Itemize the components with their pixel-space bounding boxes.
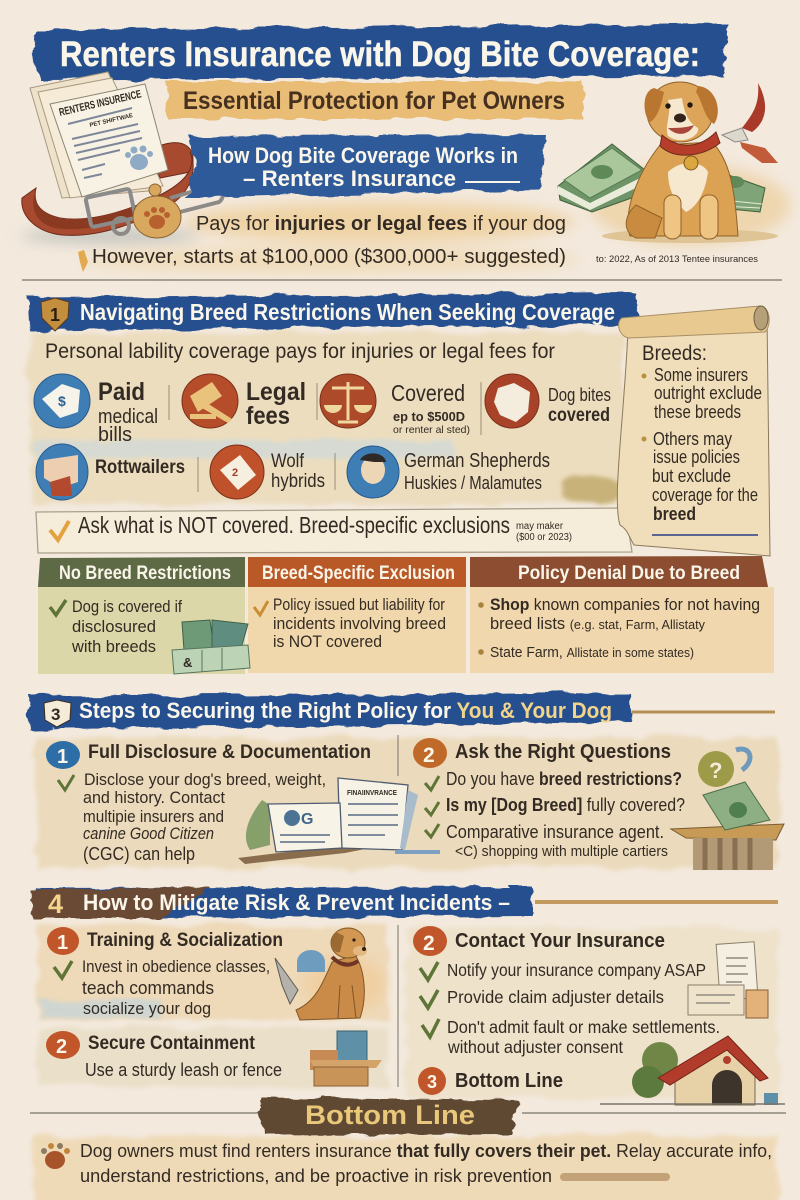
column: breed-specific exclusion: Breed-Specific Exclusion [262, 563, 455, 584]
section 4 banner [30, 887, 532, 919]
breed: wolf hybrids: hybrids [271, 471, 325, 492]
section 1 banner [28, 293, 640, 331]
scroll: breeds: Breeds: [642, 342, 707, 365]
step: contact your insurance: Provide claim adjuster details [447, 987, 664, 1007]
step 3: bottom line [418, 1067, 563, 1095]
column: policy denial: State Farm, Allistate in some states) [490, 644, 694, 661]
intro line: Personal lability coverage pays for injuries or legal fees for [45, 340, 555, 363]
badge 1 [46, 741, 80, 769]
section 3 banner: 3 [51, 705, 60, 724]
column: no breed restrictions: No Breed Restrictions [59, 563, 231, 584]
collar front [22, 152, 193, 235]
callout: ask what is not covered [36, 508, 632, 553]
badge 2 [46, 1031, 80, 1059]
step: secure containment: Secure Containment [88, 1033, 256, 1054]
step: ask the right questions [413, 738, 685, 860]
item: paid medical bills: Paid [98, 378, 145, 406]
step: full disclosure: multipie insurers and [83, 807, 224, 826]
scroll: breeds: breed [653, 504, 696, 524]
column: no breed restrictions: disclosured [72, 617, 156, 636]
illustration: dog [602, 82, 778, 243]
section 1 banner: 1 [50, 305, 60, 325]
item: paid medical bills: bills [98, 424, 132, 446]
scroll: breeds: coverage for the [652, 485, 758, 505]
icon: cash box: & [183, 655, 192, 670]
section 4: mitigate risk [30, 887, 786, 1113]
icon: shepherd [347, 446, 399, 498]
illustration: money on stand [671, 749, 784, 870]
column: no breed restrictions [38, 557, 250, 674]
icon: insurance document and collar [22, 72, 223, 238]
icon: cash box [172, 620, 250, 674]
step: full disclosure: Disclose your dog's breed, weight, [84, 770, 326, 789]
illustration: documents: FINAIINVRANCE [347, 790, 397, 797]
section 4 banner: How to Mitigate Risk & Prevent Incidents – [83, 890, 510, 915]
icon: medical bill: $ [58, 393, 66, 409]
column: no breed restrictions: with breeds [71, 637, 156, 656]
item: covered amount: ep to $500D [393, 410, 465, 424]
step: contact your insurance: Don't admit fault or make settlements. [447, 1017, 720, 1037]
icon: gavel [182, 374, 238, 428]
coverage limit: However, starts at $100,000 ($300,000+ suggested) [92, 245, 566, 268]
column: no breed restrictions: Dog is covered if [72, 597, 182, 616]
bottom line text: Dog owners must find renters insurance that fully covers their pet. Relay accurate info, [80, 1140, 772, 1161]
bottom line banner [258, 1098, 518, 1135]
subtitle banner [167, 82, 583, 119]
item: paid medical bills: medical [98, 406, 158, 428]
step: training: teach commands [82, 978, 214, 998]
section 3 banner: Steps to Securing the Right Policy for You & Your Dog [79, 698, 612, 723]
step: ask the right questions: Is my [Dog Breed] fully covered? [446, 795, 685, 815]
section 3: steps [27, 693, 784, 870]
column: policy denial: Policy Denial Due to Breed [518, 563, 740, 584]
badge 2: 2 [423, 932, 435, 955]
scroll: breeds: issue policies [653, 447, 740, 467]
badge 2 [413, 738, 447, 768]
item: dog bites covered: covered [548, 405, 610, 426]
illustration: dog with shovel [275, 928, 385, 1020]
bottom line block [32, 1098, 778, 1200]
scroll: breeds: Others may [653, 429, 732, 449]
item: covered amount: Covered [391, 380, 465, 406]
footnote: to: 2022, As of 2013 Tentee insurances [596, 254, 758, 265]
step: full disclosure: Full Disclosure & Documentation [88, 741, 371, 763]
section 1: breed restrictions [28, 293, 774, 674]
icon: rottweiler [36, 444, 88, 500]
section 4 banner: 4 [48, 889, 63, 919]
header wash [20, 165, 790, 273]
panel wash [36, 738, 778, 868]
coverage statement: Pays for injuries or legal fees if your dog [196, 213, 566, 235]
rule [632, 710, 775, 714]
step: ask the right questions: Do you have breed restrictions? [446, 769, 682, 789]
breed: rottweilers [36, 444, 185, 500]
step 3: bottom line: Bottom Line [455, 1070, 563, 1092]
item: dog bites covered [485, 374, 611, 428]
callout: ask what is not covered: ($00 or 2023) [516, 532, 572, 543]
step: full disclosure: and history. Contact [83, 788, 225, 807]
badge 1: 1 [57, 932, 68, 954]
section banner: how coverage works: – Renters Insurance [243, 166, 456, 191]
badge 1: 1 [57, 746, 68, 768]
scroll: breeds: but exclude [652, 466, 731, 486]
breed: wolf hybrids [210, 445, 325, 499]
icon: insurance document and collar: PET SHIFTWAE [89, 113, 134, 129]
collar back [150, 143, 193, 178]
column: breed-specific exclusion: Policy issued but liability for [273, 596, 445, 614]
callout: ask what is not covered: Ask what is NOT covered. Breed-specific exclusions [78, 512, 510, 538]
step: secure containment: Use a sturdy leash or fence [85, 1060, 282, 1080]
bottom line text continued: understand restrictions, and be proactive in risk prevention [80, 1165, 552, 1186]
title banner [32, 24, 728, 80]
icon: wolf hybrid: 2 [232, 467, 238, 479]
illustration: money on stand: ? [709, 758, 722, 783]
breed: wolf hybrids: Wolf [271, 451, 305, 472]
illustration: notes [688, 942, 768, 1018]
badge 1 [47, 927, 79, 955]
illustration: money stacks [558, 144, 765, 212]
step: contact your insurance: Notify your insurance company ASAP [447, 960, 706, 980]
section banner: how coverage works: How Dog Bite Coverage Works in [208, 143, 518, 168]
panel washes [38, 925, 778, 1098]
scroll: breeds: Some insurers [654, 365, 748, 385]
column: policy denial: Shop known companies for not having [490, 595, 760, 614]
section divider [30, 1112, 786, 1114]
section 1 banner: Navigating Breed Restrictions When Seeking Coverage [80, 299, 615, 325]
scroll: breeds [617, 306, 770, 556]
bottom line banner: Bottom Line [305, 1100, 475, 1130]
scroll: breeds: these breeds [654, 402, 741, 422]
breed: german shepherds, huskies: Huskies / Malamutes [404, 473, 542, 493]
callout: ask what is not covered: may maker [516, 521, 564, 532]
step: contact your insurance [413, 926, 720, 1057]
badge 2 [413, 926, 447, 956]
illustration: doghouse [600, 1036, 785, 1105]
step: contact your insurance: Contact Your Insurance [455, 930, 665, 952]
item: paid medical bills [34, 374, 158, 446]
decorative pill [560, 1173, 670, 1181]
icon: paw [41, 1143, 70, 1169]
icon: dog bite [485, 374, 539, 428]
item: legal fees [182, 374, 306, 430]
badge 3 [418, 1067, 446, 1095]
section banner: how coverage works [185, 135, 546, 198]
column: breed-specific exclusion: is NOT covered [273, 633, 382, 651]
subtitle banner: Essential Protection for Pet Owners [183, 87, 565, 115]
column: breed-specific exclusion [248, 557, 466, 673]
panel: bottom line [32, 1136, 778, 1200]
badge 2: 2 [56, 1036, 67, 1058]
step: training: socialize your dog [83, 999, 211, 1018]
divider [397, 925, 399, 1087]
header block [20, 24, 790, 280]
column: policy denial [470, 556, 774, 673]
dividers [169, 382, 481, 492]
bush illustration [560, 475, 624, 505]
step: ask the right questions: <C) shopping with multiple cartiers [455, 843, 668, 860]
badge 3: 3 [427, 1072, 437, 1092]
breed: german shepherds, huskies [347, 446, 550, 498]
item: covered amount [320, 374, 470, 436]
icon: scales [320, 374, 376, 428]
step: contact your insurance: without adjuster consent [447, 1037, 623, 1057]
item: dog bites covered: Dog bites [548, 385, 611, 405]
step: training [47, 927, 283, 1018]
breed: german shepherds, huskies: German Shepherds [404, 450, 550, 472]
item: legal fees: Legal [246, 378, 306, 406]
scroll: breeds: outright exclude [654, 383, 762, 403]
step: training: Invest in obedience classes, [82, 957, 270, 976]
illustration: box [310, 1031, 382, 1086]
step: full disclosure [46, 741, 371, 864]
panel wash [30, 332, 625, 504]
step: full disclosure: (CGC) can help [83, 844, 195, 864]
title banner: Renters Insurance with Dog Bite Coverage: [60, 35, 700, 74]
illustration: documents [238, 778, 440, 864]
step: ask the right questions: Comparative insurance agent. [446, 822, 664, 842]
divider [22, 279, 782, 281]
icon: insurance document and collar: RENTERS INSURENCE [58, 88, 143, 119]
item: covered amount: or renter al sted) [393, 424, 470, 436]
column: breed-specific exclusion: incidents involving breed [273, 615, 446, 633]
badge 2: 2 [423, 744, 435, 767]
illustration: documents: G [301, 811, 313, 828]
step: secure containment [46, 1031, 282, 1080]
rule [535, 900, 778, 904]
breed: rottweilers: Rottwailers [95, 457, 185, 478]
step: full disclosure: canine Good Citizen [83, 824, 214, 843]
step: ask the right questions: Ask the Right Questions [455, 741, 671, 763]
section 3 banner [27, 693, 632, 730]
step: training: Training & Socialization [87, 929, 283, 951]
item: legal fees: fees [246, 402, 290, 430]
panel: blue wash strip [34, 440, 454, 458]
column: policy denial: breed lists (e.g. stat, Farm, Allistaty [490, 614, 705, 633]
